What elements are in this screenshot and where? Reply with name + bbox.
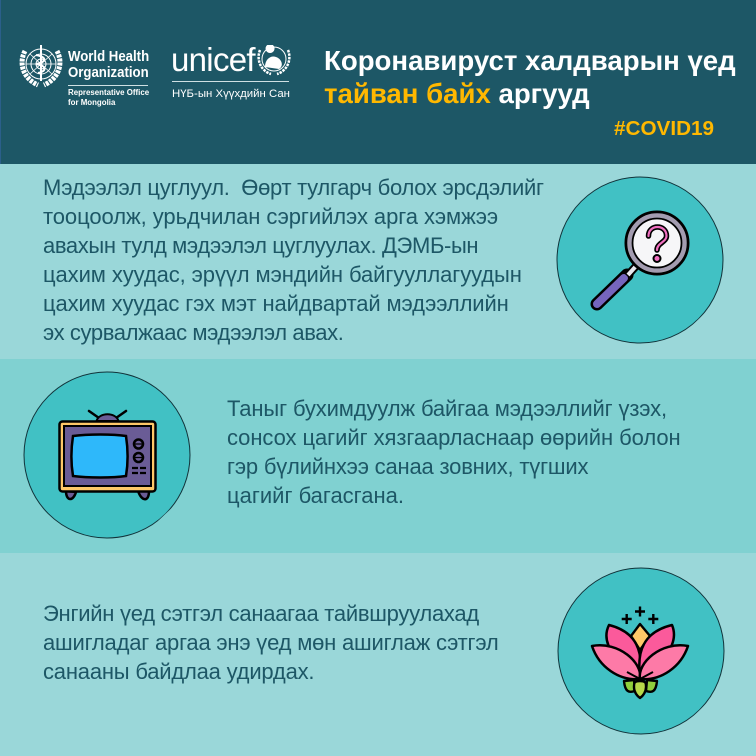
header band [0,0,756,164]
title [324,45,736,109]
WHO logo: World Health [68,49,149,65]
UNICEF logo: НҮБ-ын Хүүхдийн Сан [172,88,290,100]
icon: lotus flower [558,568,724,734]
text: gather information: цахим хуудас, эрүүл мэндийн байгууллагуудын [43,262,522,287]
panel: calming methods [0,553,756,756]
text: limit news [227,396,681,508]
title: Коронавируст халдварын үед [324,45,736,76]
text: gather information: эх сурвалжаас мэдээлэл авах. [43,320,343,345]
text: gather information: авахын тулд мэдээлэл цуглуулах. ДЭМБ-ын [43,233,478,258]
panel: gather information [0,164,756,359]
icon: magnifying glass with question mark [556,176,724,344]
text: gather information: Мэдээлэл цуглуул. Өөрт тулгарч болох эрсдэлийг [43,175,544,200]
title: тайван байх аргууд [324,78,590,109]
WHO logo: Representative Office [68,88,149,97]
WHO logo [20,45,149,107]
left edge line [0,0,1,164]
hashtag: #COVID19 [614,117,714,140]
UNICEF logo [171,41,291,100]
text: limit news: цагийг багасгана. [227,483,404,508]
text: calming methods: Энгийн үед сэтгэл санаагаа тайвшруулахад [43,601,479,626]
text: gather information: цахим хуудас гэх мэт найдвартай мэдээллийн [43,291,509,316]
text: gather information: тооцоолж, урьдчилан сэргийлэх арга хэмжээ [43,204,498,229]
text: limit news: Таныг бухимдуулж байгаа мэдээллийг үзэх, [227,396,667,421]
icon: television [24,372,190,538]
text: gather information [43,175,544,345]
text: calming methods: санааны байдлаа удирдах. [43,659,314,684]
UNICEF logo: unicef [171,41,255,78]
text: calming methods: ашигладаг аргаа энэ үед мөн ашиглаж сэтгэл [43,630,499,655]
text: calming methods [43,601,499,684]
text: limit news: сонсох цагийг хязгаарласнаар өөрийн болон [227,425,681,450]
panel: limit news [0,359,756,553]
WHO logo: for Mongolia [68,98,115,107]
text: limit news: гэр бүлийнхээ санаа зовних, түгших [227,454,588,479]
WHO logo: Organization [68,64,149,80]
